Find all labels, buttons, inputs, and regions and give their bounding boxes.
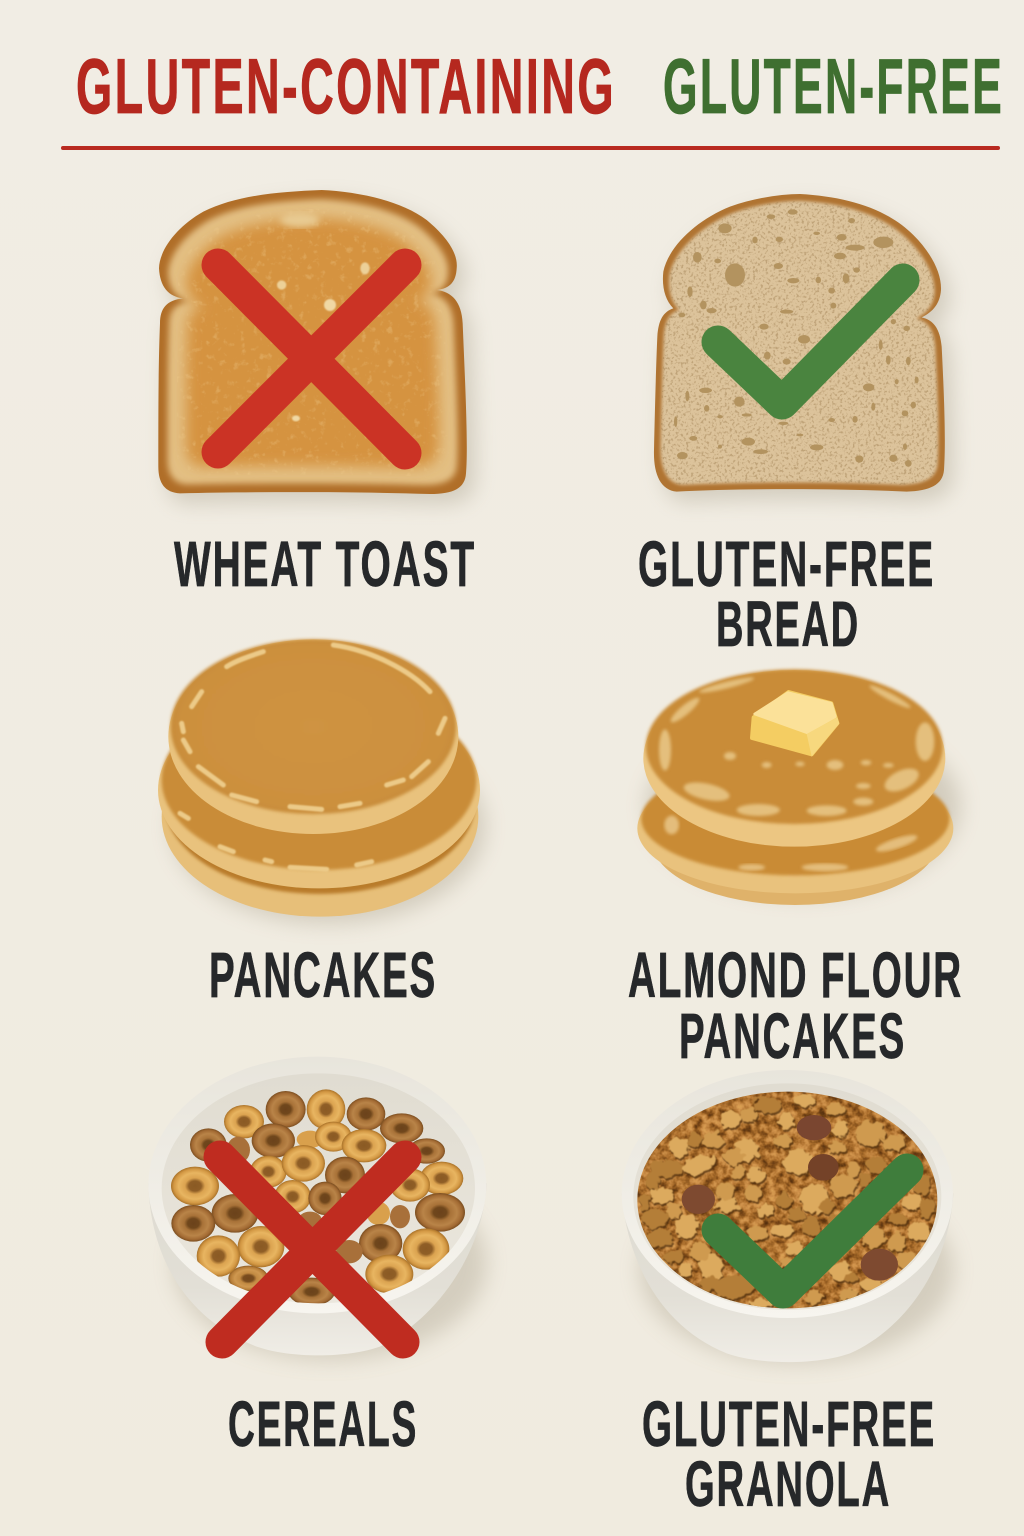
food: wheat toast (158, 190, 475, 504)
food: cereal bowl (148, 1057, 487, 1360)
food: granola bowl (622, 1070, 953, 1363)
toast texture (182, 219, 440, 468)
header rule (61, 146, 1000, 150)
top pancake (168, 639, 458, 834)
bottom pancake (162, 713, 478, 917)
label: gluten-free granola (642, 1388, 936, 1520)
middle pancake (158, 690, 480, 888)
bottom pancake (652, 775, 938, 905)
label: gluten-free bread: BREAD (716, 588, 860, 660)
label: pancakes: PANCAKES (209, 939, 437, 1011)
label: wheat toast: WHEAT TOAST (174, 528, 476, 600)
food: almond flour pancakes (637, 669, 960, 905)
label: gluten-free granola: GRANOLA (685, 1448, 891, 1520)
raisins (682, 1115, 898, 1281)
label: gluten-free bread (638, 528, 935, 660)
food: pancakes (158, 639, 485, 923)
food: gluten-free bread (653, 193, 953, 502)
granola clusters (633, 1090, 943, 1313)
label: cereals: CEREALS (228, 1388, 418, 1460)
red cross: cereals (220, 1157, 405, 1342)
butter pat (752, 692, 839, 757)
bread crumb holes (674, 209, 919, 467)
bread texture (660, 201, 938, 485)
red cross: wheat toast (218, 265, 405, 453)
heading: gluten-containing: GLUTEN-CONTAINING (76, 42, 616, 130)
green check: gluten-free bread (718, 280, 903, 403)
top pancake (643, 669, 945, 847)
middle pancake (637, 762, 953, 893)
green check: gluten-free granola (718, 1170, 907, 1292)
cereal rings (171, 1089, 465, 1306)
label: almond flour pancakes (628, 939, 963, 1072)
